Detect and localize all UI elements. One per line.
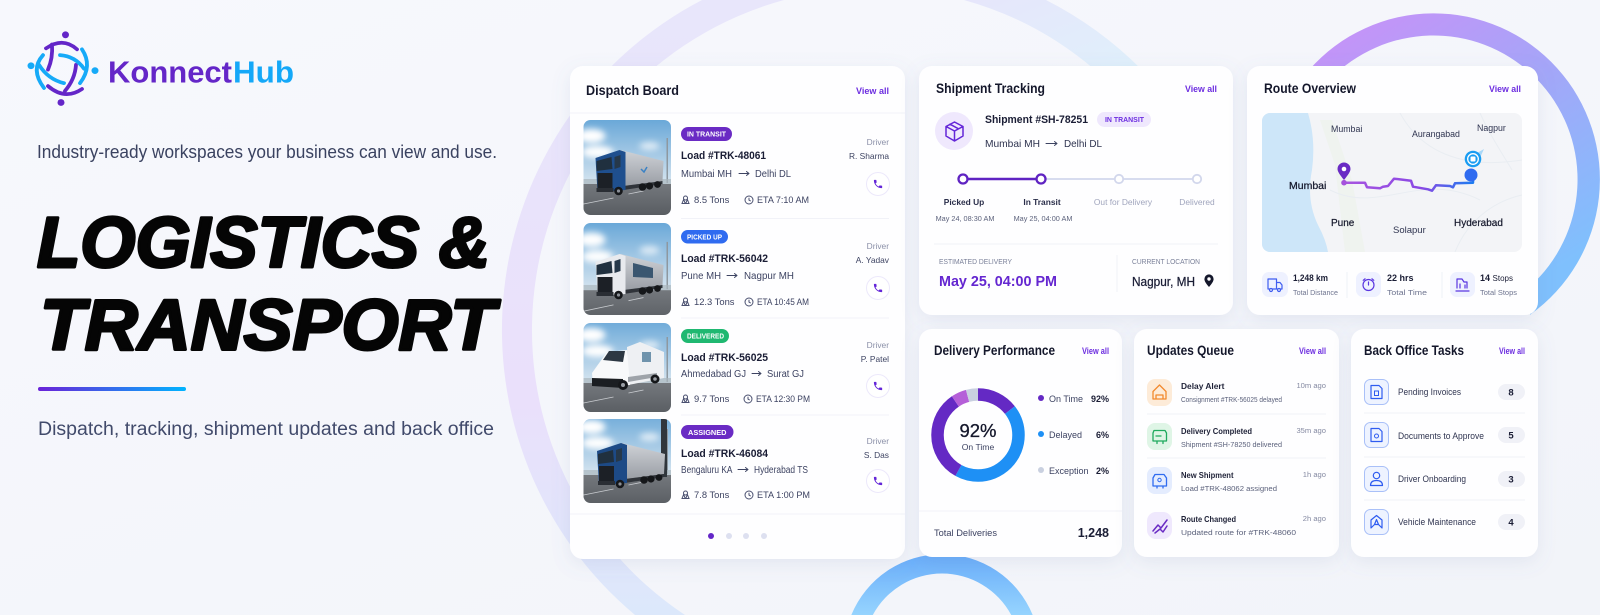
- task: vehicle maintenance: Vehicle Maintenance: [1398, 517, 1476, 527]
- donut chart: On Time: [962, 442, 994, 452]
- driver: Driver: [867, 340, 889, 350]
- weight and eta: 8.5 Tons: [694, 194, 730, 205]
- logo wordmark: Konnect: [108, 54, 232, 90]
- panel: route overview: [1247, 66, 1538, 315]
- driver: [849, 137, 889, 161]
- update: delivery completed: [1147, 423, 1326, 450]
- load id: Load #TRK-46084: [681, 448, 769, 460]
- weight and eta: 9.7 Tons: [694, 393, 730, 404]
- heading: back office tasks: Back Office Tasks: [1364, 343, 1464, 358]
- load row: TRK-56042: [584, 223, 890, 315]
- shipment id: Shipment #SH-78251: [985, 114, 1088, 126]
- load row: TRK-46084: [584, 419, 890, 503]
- status pill: picked up: [681, 230, 728, 244]
- photo: blue truck: [578, 120, 672, 216]
- link: view all: View all: [856, 86, 889, 96]
- route: Delhi DL: [1064, 139, 1102, 150]
- driver: Driver: [867, 436, 889, 446]
- stat: total distance: [1262, 272, 1338, 297]
- icon: package: [935, 112, 973, 150]
- update: delivery completed: Delivery Completed: [1181, 426, 1252, 436]
- current location: Nagpur, MH: [1132, 275, 1195, 289]
- panel: back office tasks: [1351, 329, 1538, 557]
- stat: total stops: 14 Stops: [1480, 273, 1513, 283]
- legend: [1038, 394, 1109, 476]
- route line: [1344, 175, 1473, 191]
- stat: total stops: Total Stops: [1480, 288, 1517, 297]
- update: new shipment: New Shipment: [1181, 470, 1234, 480]
- current location: [1132, 257, 1214, 289]
- load row: TRK-48061: [578, 120, 890, 216]
- link: view all: View all: [1185, 84, 1217, 94]
- heading: route overview: Route Overview: [1264, 81, 1356, 96]
- main heading: Logistics & Transport: LOGISTICS &: [37, 204, 490, 283]
- status pill: delivered: [681, 329, 729, 343]
- total deliveries: Total Deliveries: [934, 528, 997, 539]
- map labels: Nagpur: [1477, 123, 1506, 133]
- weight and eta: ETA 1:00 PM: [757, 489, 810, 500]
- heading: updates queue: Updates Queue: [1147, 343, 1234, 358]
- status pill: delivered: DELIVERED: [687, 332, 724, 340]
- task: pending invoices: [1364, 380, 1525, 404]
- legend: 2%: [1096, 466, 1109, 476]
- route map: [1262, 113, 1522, 252]
- panel: delivery performance: [919, 329, 1122, 557]
- progress timeline: [936, 174, 1215, 223]
- link: view all: View all: [1082, 346, 1109, 356]
- load id: Load #TRK-48061: [681, 150, 766, 162]
- task: documents to approve: Documents to Approve: [1398, 431, 1484, 441]
- status pill: in transit: IN TRANSIT: [687, 130, 726, 138]
- route: [681, 169, 792, 180]
- heading: shipment tracking: Shipment Tracking: [936, 81, 1045, 96]
- map labels: [1289, 123, 1506, 236]
- estimated delivery: May 25, 04:00 PM: [939, 273, 1057, 290]
- task: driver onboarding: [1364, 466, 1525, 492]
- update: new shipment: [1147, 467, 1326, 494]
- donut chart: 92%: [959, 420, 997, 441]
- update: route changed: Route Changed: [1181, 514, 1236, 524]
- driver: [861, 340, 889, 364]
- progress timeline: In Transit: [1023, 197, 1061, 207]
- update: route changed: Updated route for #TRK-48060: [1181, 528, 1296, 537]
- progress timeline: May 24, 08:30 AM: [936, 214, 994, 223]
- icon: phone: [866, 470, 890, 492]
- map labels: Pune: [1331, 218, 1355, 229]
- logo wordmark: Hub: [233, 54, 294, 90]
- route: [681, 271, 794, 282]
- legend: 92%: [1091, 394, 1109, 404]
- status pill: [1097, 112, 1151, 127]
- update: new shipment: Load #TRK-48062 assigned: [1181, 484, 1277, 493]
- driver: [864, 436, 889, 460]
- task: vehicle maintenance: [1364, 510, 1525, 534]
- route: [681, 369, 804, 380]
- progress timeline: May 25, 04:00 AM: [1014, 214, 1072, 223]
- icon: destination marker and truck badge: [1464, 149, 1484, 182]
- tagline: Industry-ready workspaces your business can view and use.: [37, 141, 497, 162]
- status pill: picked up: PICKED UP: [687, 232, 722, 241]
- task: documents to approve: [1364, 422, 1525, 448]
- stat: total time: 22 hrs: [1387, 273, 1414, 283]
- load id: Load #TRK-56025: [681, 352, 768, 364]
- progress timeline: Out for Delivery: [1094, 197, 1153, 207]
- weight and eta: [682, 296, 809, 307]
- driver: Driver: [867, 137, 889, 147]
- total deliveries: [934, 526, 1109, 540]
- panel: updates queue: [1134, 329, 1339, 557]
- route: [985, 139, 1102, 150]
- main heading: Logistics & Transport: TRANSPORT: [40, 286, 501, 366]
- load row: TRK-56025: [578, 319, 890, 415]
- photo: white truck: [584, 223, 671, 315]
- link: view all: View all: [1489, 84, 1521, 94]
- weight and eta: [682, 489, 810, 500]
- driver: S. Das: [864, 450, 889, 460]
- heading: dispatch board: Dispatch Board: [586, 83, 679, 98]
- stat: total time: [1356, 272, 1427, 297]
- stat: total distance: Total Distance: [1293, 288, 1338, 297]
- status pill: in transit: [681, 127, 732, 141]
- weight and eta: 12.3 Tons: [694, 296, 735, 307]
- map labels: Aurangabad: [1412, 129, 1460, 139]
- update: new shipment: 1h ago: [1303, 470, 1326, 479]
- route: Bengaluru KA: [681, 465, 733, 476]
- route: Delhi DL: [755, 169, 792, 180]
- task: pending invoices: Pending Invoices: [1398, 387, 1461, 397]
- icon: origin pin: [1338, 163, 1350, 186]
- weight and eta: ETA 7:10 AM: [757, 194, 809, 205]
- status pill: IN TRANSIT: [1105, 115, 1144, 124]
- task: documents to approve: 5: [1508, 430, 1514, 442]
- weight and eta: [682, 194, 809, 205]
- subheading: Dispatch, tracking, shipment updates and back office: [38, 419, 494, 440]
- status pill: assigned: [681, 425, 734, 439]
- donut chart: [938, 394, 1018, 476]
- update: route changed: [1147, 512, 1326, 539]
- legend: On Time: [1049, 394, 1083, 404]
- weight and eta: [682, 393, 810, 404]
- panel: shipment tracking: [919, 66, 1233, 315]
- driver: Driver: [867, 241, 889, 251]
- route: Mumbai MH: [681, 169, 732, 180]
- update: delay alert: Consignment #TRK-56025 delayed: [1181, 395, 1282, 404]
- link: view all: View all: [1499, 346, 1525, 356]
- update: delivery completed: Shipment #SH-78250 delivered: [1181, 440, 1282, 449]
- route: Ahmedabad GJ: [681, 369, 746, 380]
- task: driver onboarding: Driver Onboarding: [1398, 474, 1466, 484]
- map labels: Mumbai: [1331, 124, 1362, 134]
- load id: Load #TRK-56042: [681, 253, 768, 265]
- icon: phone: [866, 374, 890, 398]
- driver: R. Sharma: [849, 151, 889, 161]
- pagination dots: [708, 533, 767, 539]
- legend: Delayed: [1049, 430, 1082, 440]
- update: route changed: 2h ago: [1303, 514, 1326, 523]
- driver: P. Patel: [861, 354, 889, 364]
- driver: A. Yadav: [856, 255, 890, 265]
- map labels: Hyderabad: [1454, 218, 1503, 229]
- task: driver onboarding: 3: [1508, 474, 1514, 486]
- logo: KonnectHub: [28, 31, 294, 106]
- icon: phone: [866, 172, 890, 196]
- total deliveries: 1,248: [1078, 526, 1109, 540]
- photo: white van: [584, 323, 671, 412]
- map labels: Mumbai: [1289, 180, 1326, 192]
- status pill: assigned: ASSIGNED: [688, 428, 727, 437]
- weight and eta: 7.8 Tons: [694, 489, 730, 500]
- heading: delivery performance: Delivery Performance: [934, 343, 1055, 358]
- panel: dispatch board: [570, 66, 905, 559]
- estimated delivery: ESTIMATED DELIVERY: [939, 257, 1012, 266]
- update: delay alert: [1147, 379, 1326, 406]
- task: pending invoices: 8: [1508, 388, 1514, 398]
- driver: [856, 241, 890, 265]
- main heading: Logistics & Transport: [37, 204, 501, 366]
- current location: CURRENT LOCATION: [1132, 257, 1200, 266]
- legend: 6%: [1096, 430, 1109, 440]
- route: [681, 465, 808, 476]
- map labels: Solapur: [1393, 225, 1426, 236]
- icon: logo ring mark: [28, 31, 98, 106]
- update: delay alert: 10m ago: [1296, 381, 1326, 390]
- route: Surat GJ: [767, 369, 804, 380]
- link: view all: View all: [1299, 346, 1326, 356]
- update: delay alert: Delay Alert: [1181, 381, 1225, 391]
- photo: blue truck at port: [584, 419, 671, 503]
- icon: phone: [866, 276, 890, 300]
- progress timeline: Delivered: [1179, 197, 1215, 207]
- task: vehicle maintenance: 4: [1508, 518, 1514, 528]
- stat: total distance: 1,248 km: [1293, 273, 1328, 283]
- weight and eta: ETA 10:45 AM: [757, 296, 809, 307]
- legend: Exception: [1049, 466, 1089, 476]
- progress timeline: Picked Up: [944, 197, 984, 207]
- stat: total time: Total Time: [1387, 288, 1427, 297]
- logo wordmark: [108, 54, 294, 90]
- estimated delivery: [939, 257, 1057, 290]
- route: Mumbai MH: [985, 139, 1040, 150]
- stat: total stops: [1450, 272, 1517, 297]
- update: delivery completed: 35m ago: [1296, 426, 1326, 435]
- route: Pune MH: [681, 271, 721, 282]
- accent gradient line: [38, 387, 186, 391]
- weight and eta: ETA 12:30 PM: [756, 393, 810, 404]
- route: Nagpur MH: [744, 271, 794, 282]
- route: Hyderabad TS: [754, 465, 808, 476]
